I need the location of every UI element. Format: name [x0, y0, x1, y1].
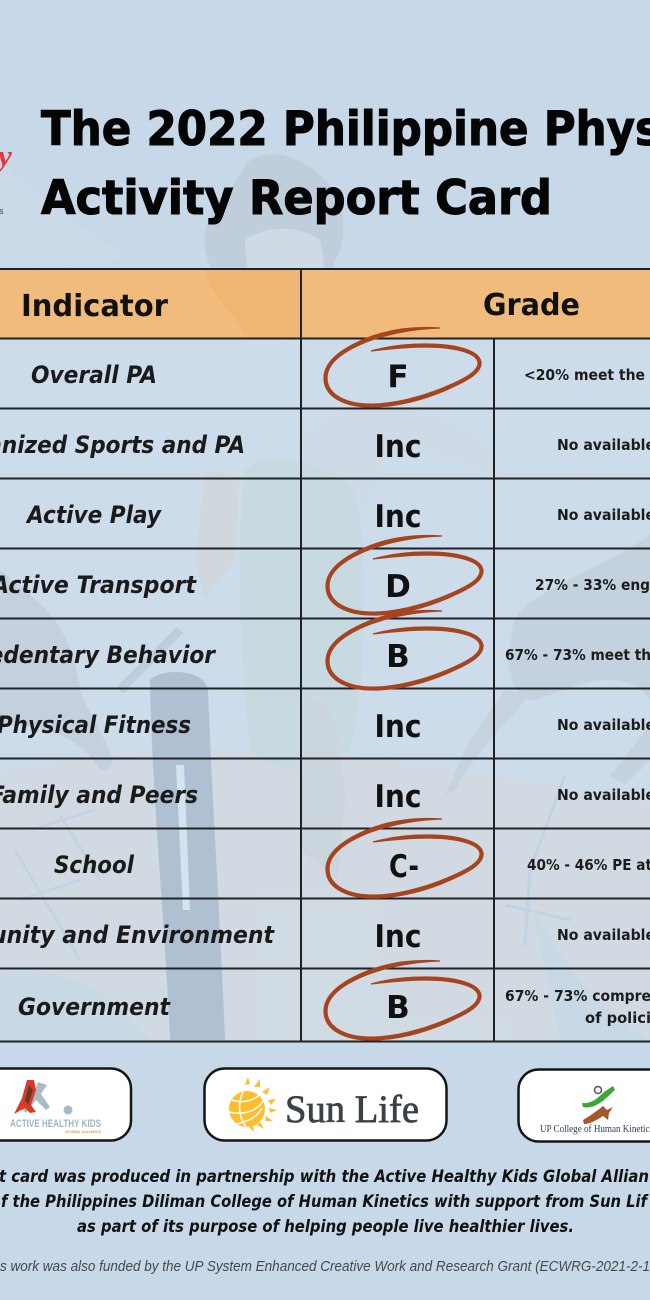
table header: Grade — [483, 288, 580, 323]
table header — [0, 269, 650, 338]
table grid — [0, 269, 650, 1042]
title: Activity Report Card — [41, 171, 552, 226]
evidence column — [505, 366, 650, 1027]
grade column: Inc — [374, 919, 422, 955]
grade column: C- — [389, 849, 419, 885]
grade column: D — [385, 569, 411, 605]
indicator column: Government — [18, 993, 171, 1021]
grade column: Inc — [374, 429, 422, 465]
grade column: Inc — [374, 779, 422, 815]
indicator column — [0, 361, 275, 1021]
table header: Indicator — [21, 289, 168, 324]
logo: Active Healthy Kids: ACTIVE HEALTHY KIDS — [10, 1118, 101, 1130]
top-left logo fragment — [0, 138, 12, 216]
indicator column: Active Play — [25, 501, 162, 529]
partnership statement — [0, 1167, 649, 1237]
logo: UP College of Human Kinetics — [518, 1070, 650, 1142]
logo: Active Healthy Kids: GLOBAL ALLIANCE — [65, 1129, 101, 1134]
title — [41, 102, 650, 226]
indicator column: Overall PA — [31, 361, 157, 389]
grade column: B — [386, 990, 410, 1026]
partnership statement: as part of its purpose of helping people live healthier lives. — [77, 1217, 574, 1237]
grade column: Inc — [374, 709, 422, 745]
logo: Sun Life — [204, 1068, 446, 1140]
logo: Sun Life: Sun Life — [285, 1088, 419, 1131]
indicator column: School — [54, 851, 135, 879]
grade column: Inc — [374, 499, 422, 535]
grade circles — [324, 328, 483, 1040]
grade column — [374, 359, 422, 1026]
indicator column: Physical Fitness — [0, 711, 191, 739]
grade column: B — [386, 639, 410, 675]
logo: Active Healthy Kids — [0, 1068, 131, 1140]
background illustration — [0, 154, 650, 1041]
grade column: F — [387, 359, 409, 395]
table panel tint — [0, 338, 650, 1041]
